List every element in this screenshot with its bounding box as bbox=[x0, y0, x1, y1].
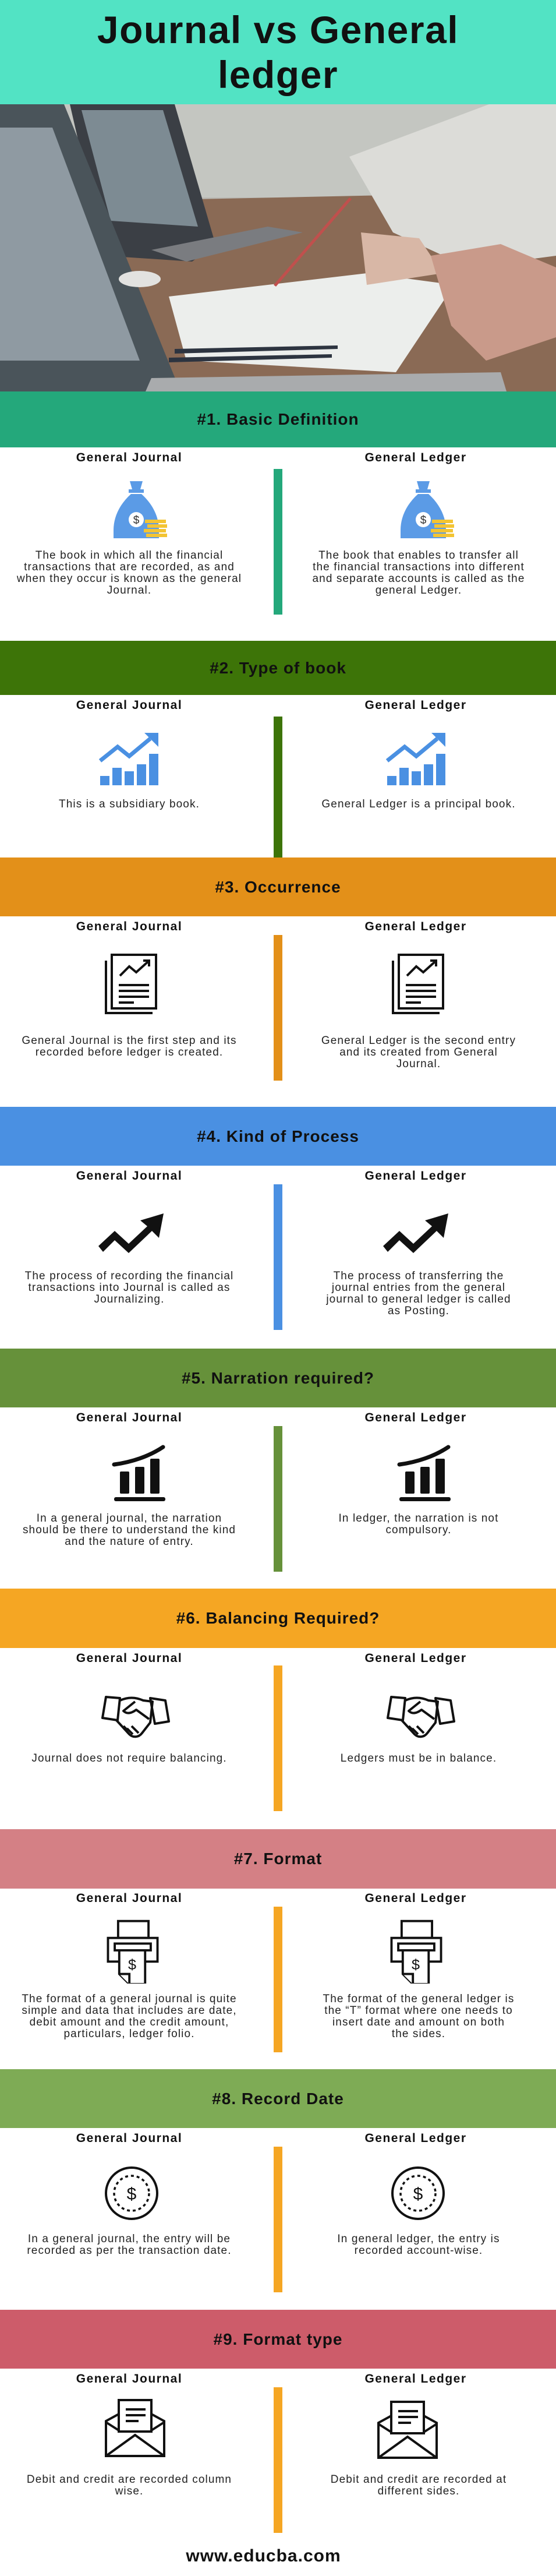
text: ledger: Debit and credit are recorded at bbox=[331, 2473, 507, 2486]
section 6 header bbox=[0, 1589, 556, 1648]
text: ledger: The format of the general ledger is bbox=[323, 1993, 514, 2005]
heading: General Journal: General Journal bbox=[76, 1652, 182, 1665]
title: ledger bbox=[218, 52, 338, 96]
heading: General Journal: General Journal bbox=[76, 451, 182, 464]
text: ledger: journal to general ledger is called bbox=[326, 1293, 511, 1305]
heading: General Journal: General Journal bbox=[76, 698, 182, 712]
icon: money bag bbox=[114, 481, 167, 538]
icon: dollar coin right bbox=[391, 2166, 445, 2220]
icon: growth chart bbox=[99, 733, 158, 785]
divider bbox=[274, 2147, 282, 2292]
divider bbox=[274, 1184, 282, 1330]
section 5 content bbox=[23, 1411, 498, 1572]
section 5 header bbox=[0, 1349, 556, 1407]
section 6 header: #6. Balancing Required? bbox=[176, 1609, 380, 1627]
text: journal: Debit and credit are recorded column bbox=[27, 2473, 232, 2486]
text: journal bbox=[27, 2233, 232, 2257]
section 2 content bbox=[59, 698, 516, 858]
text: journal: particulars, ledger folio. bbox=[63, 2028, 195, 2040]
text: ledger: General Ledger is the second entry bbox=[321, 1035, 516, 1047]
section 4 header bbox=[0, 1107, 556, 1166]
divider bbox=[274, 1426, 282, 1572]
section 4 content bbox=[25, 1169, 511, 1330]
text: ledger: General Ledger is a principal book. bbox=[321, 798, 516, 810]
text: journal: The process of recording the financial bbox=[25, 1270, 233, 1282]
icon: bar chart bbox=[112, 1445, 165, 1501]
section 6 content bbox=[31, 1652, 497, 1811]
text: ledger: the financial transactions into different bbox=[313, 561, 525, 573]
text: ledger bbox=[337, 2233, 500, 2257]
title: Journal vs General bbox=[97, 8, 459, 51]
text: journal: and the nature of entry. bbox=[65, 1536, 194, 1548]
section 7 header bbox=[0, 1829, 556, 1889]
text: ledger: In ledger, the narration is not bbox=[339, 1512, 498, 1525]
text: journal bbox=[22, 1993, 237, 2040]
text: journal: The book in which all the financial bbox=[36, 549, 223, 562]
text: ledger: Journal. bbox=[396, 1058, 441, 1070]
icon: money bag right bbox=[401, 481, 454, 538]
heading: General Journal: General Journal bbox=[76, 2132, 182, 2145]
icon: growth chart right bbox=[385, 733, 445, 785]
icon: handshake right bbox=[387, 1696, 455, 1738]
text: ledger: recorded account-wise. bbox=[355, 2245, 483, 2257]
heading: General Ledger: General Ledger bbox=[364, 2132, 467, 2145]
icon: handshake bbox=[101, 1696, 170, 1738]
icon: printer receipt bbox=[107, 1920, 158, 1984]
heading: General Journal: General Journal bbox=[76, 920, 182, 933]
icon: dollar coin bbox=[105, 2166, 158, 2220]
text: ledger: different sides. bbox=[378, 2485, 459, 2497]
section 9 header: #9. Format type bbox=[214, 2330, 342, 2348]
section 7 content bbox=[22, 1892, 514, 2052]
section 8 header: #8. Record Date bbox=[212, 2089, 344, 2108]
text: ledger: the “T” format where one needs to bbox=[324, 2005, 513, 2017]
divider bbox=[274, 935, 282, 1081]
section 7 header: #7. Format bbox=[234, 1850, 322, 1868]
heading: General Journal: General Journal bbox=[76, 1169, 182, 1183]
text: ledger: the sides. bbox=[392, 2028, 445, 2040]
text: ledger: insert date and amount on both bbox=[332, 2016, 505, 2028]
text: journal: should be there to understand the kind bbox=[23, 1524, 236, 1536]
text: journal bbox=[16, 549, 242, 597]
text: journal: This is a subsidiary book. bbox=[59, 798, 200, 810]
text: journal: transactions that are recorded, as and bbox=[24, 561, 235, 573]
text: ledger: journal entries from the general bbox=[332, 1282, 505, 1294]
heading: General Journal: General Journal bbox=[76, 1411, 182, 1424]
section 4 header: #4. Kind of Process bbox=[197, 1127, 359, 1145]
text: journal: Journal. bbox=[107, 584, 151, 597]
text: ledger: and separate accounts is called as the bbox=[312, 573, 525, 585]
icon: zigzag arrow bbox=[98, 1213, 164, 1253]
section 5 header: #5. Narration required? bbox=[182, 1369, 374, 1386]
section 1 header: #1. Basic Definition bbox=[197, 410, 359, 428]
icon: printer receipt right bbox=[390, 1920, 442, 1984]
text: journal: recorded as per the transaction date. bbox=[27, 2245, 232, 2257]
text: ledger bbox=[321, 1035, 516, 1070]
text: journal: wise. bbox=[115, 2485, 143, 2497]
text: ledger: compulsory. bbox=[385, 1524, 452, 1536]
section 3 header: #3. Occurrence bbox=[215, 877, 341, 896]
text: journal: simple and data that includes are date, bbox=[22, 2005, 237, 2017]
heading: General Ledger: General Ledger bbox=[364, 698, 467, 712]
text: journal: when they occur is known as the general bbox=[17, 573, 242, 585]
text: ledger: and its created from General bbox=[339, 1046, 498, 1058]
heading: General Ledger: General Ledger bbox=[364, 920, 467, 933]
text: journal: In a general journal, the entry will be bbox=[28, 2233, 231, 2245]
text: journal: General Journal is the first step and its bbox=[22, 1035, 237, 1047]
section 9 header bbox=[0, 2310, 556, 2369]
heading: General Ledger: General Ledger bbox=[364, 1411, 467, 1424]
heading: General Ledger: General Ledger bbox=[364, 1169, 467, 1183]
text: ledger: Ledgers must be in balance. bbox=[341, 1752, 497, 1765]
section 8 content bbox=[27, 2132, 500, 2292]
section 2 header: #2. Type of book bbox=[210, 658, 346, 677]
heading: General Ledger: General Ledger bbox=[364, 451, 467, 464]
heading: General Journal: General Journal bbox=[76, 2372, 182, 2386]
text: ledger bbox=[323, 1993, 514, 2040]
text: journal: In a general journal, the narration bbox=[37, 1512, 222, 1525]
icon: envelope bbox=[105, 2399, 165, 2457]
text: journal bbox=[23, 1512, 236, 1548]
section 2 header bbox=[0, 641, 556, 695]
text: journal: recorded before ledger is created. bbox=[36, 1046, 223, 1058]
text: journal: debit amount and the credit amount, bbox=[30, 2016, 229, 2028]
icon: bar chart right bbox=[397, 1445, 451, 1501]
text: journal bbox=[4, 2474, 254, 2497]
divider bbox=[274, 1907, 282, 2052]
section 3 header bbox=[0, 858, 556, 916]
section 8 header bbox=[0, 2069, 556, 2128]
text: ledger bbox=[326, 1270, 511, 1317]
section 3 content bbox=[22, 920, 516, 1081]
icon: envelope right bbox=[377, 2401, 438, 2459]
photo: people working on laptops bbox=[0, 104, 556, 391]
text: ledger: as Posting. bbox=[388, 1305, 449, 1317]
text: ledger: general Ledger. bbox=[376, 584, 462, 597]
text: journal: transactions into Journal is called as bbox=[28, 1282, 231, 1294]
text: ledger bbox=[293, 2474, 544, 2497]
section 1 content bbox=[16, 451, 525, 615]
divider bbox=[274, 2387, 282, 2533]
icon: report document bbox=[105, 954, 157, 1014]
text: journal bbox=[25, 1270, 233, 1305]
icon: zigzag arrow right bbox=[383, 1213, 448, 1253]
text: journal: Journal does not require balancing. bbox=[31, 1752, 227, 1765]
text: ledger: The book that enables to transfer all bbox=[318, 549, 519, 562]
divider bbox=[274, 717, 282, 858]
heading: General Ledger: General Ledger bbox=[364, 1892, 467, 1905]
text: journal: Journalizing. bbox=[94, 1293, 164, 1305]
text: ledger: The process of transferring the bbox=[334, 1270, 504, 1282]
heading: General Journal: General Journal bbox=[76, 1892, 182, 1905]
text: journal bbox=[22, 1035, 237, 1058]
text: ledger: In general ledger, the entry is bbox=[337, 2233, 500, 2245]
divider bbox=[274, 1665, 282, 1811]
divider bbox=[274, 469, 282, 615]
section 1 header bbox=[0, 391, 556, 447]
text: ledger bbox=[312, 549, 525, 597]
section 9 content bbox=[27, 2372, 507, 2533]
text: ledger bbox=[339, 1512, 498, 1536]
footer: website: www.educba.com bbox=[186, 2546, 341, 2566]
heading: General Ledger: General Ledger bbox=[364, 1652, 467, 1665]
icon: report document right bbox=[392, 954, 444, 1014]
text: journal: The format of a general journal is quite bbox=[22, 1993, 237, 2005]
heading: General Ledger: General Ledger bbox=[364, 2372, 467, 2386]
title bbox=[0, 0, 556, 104]
